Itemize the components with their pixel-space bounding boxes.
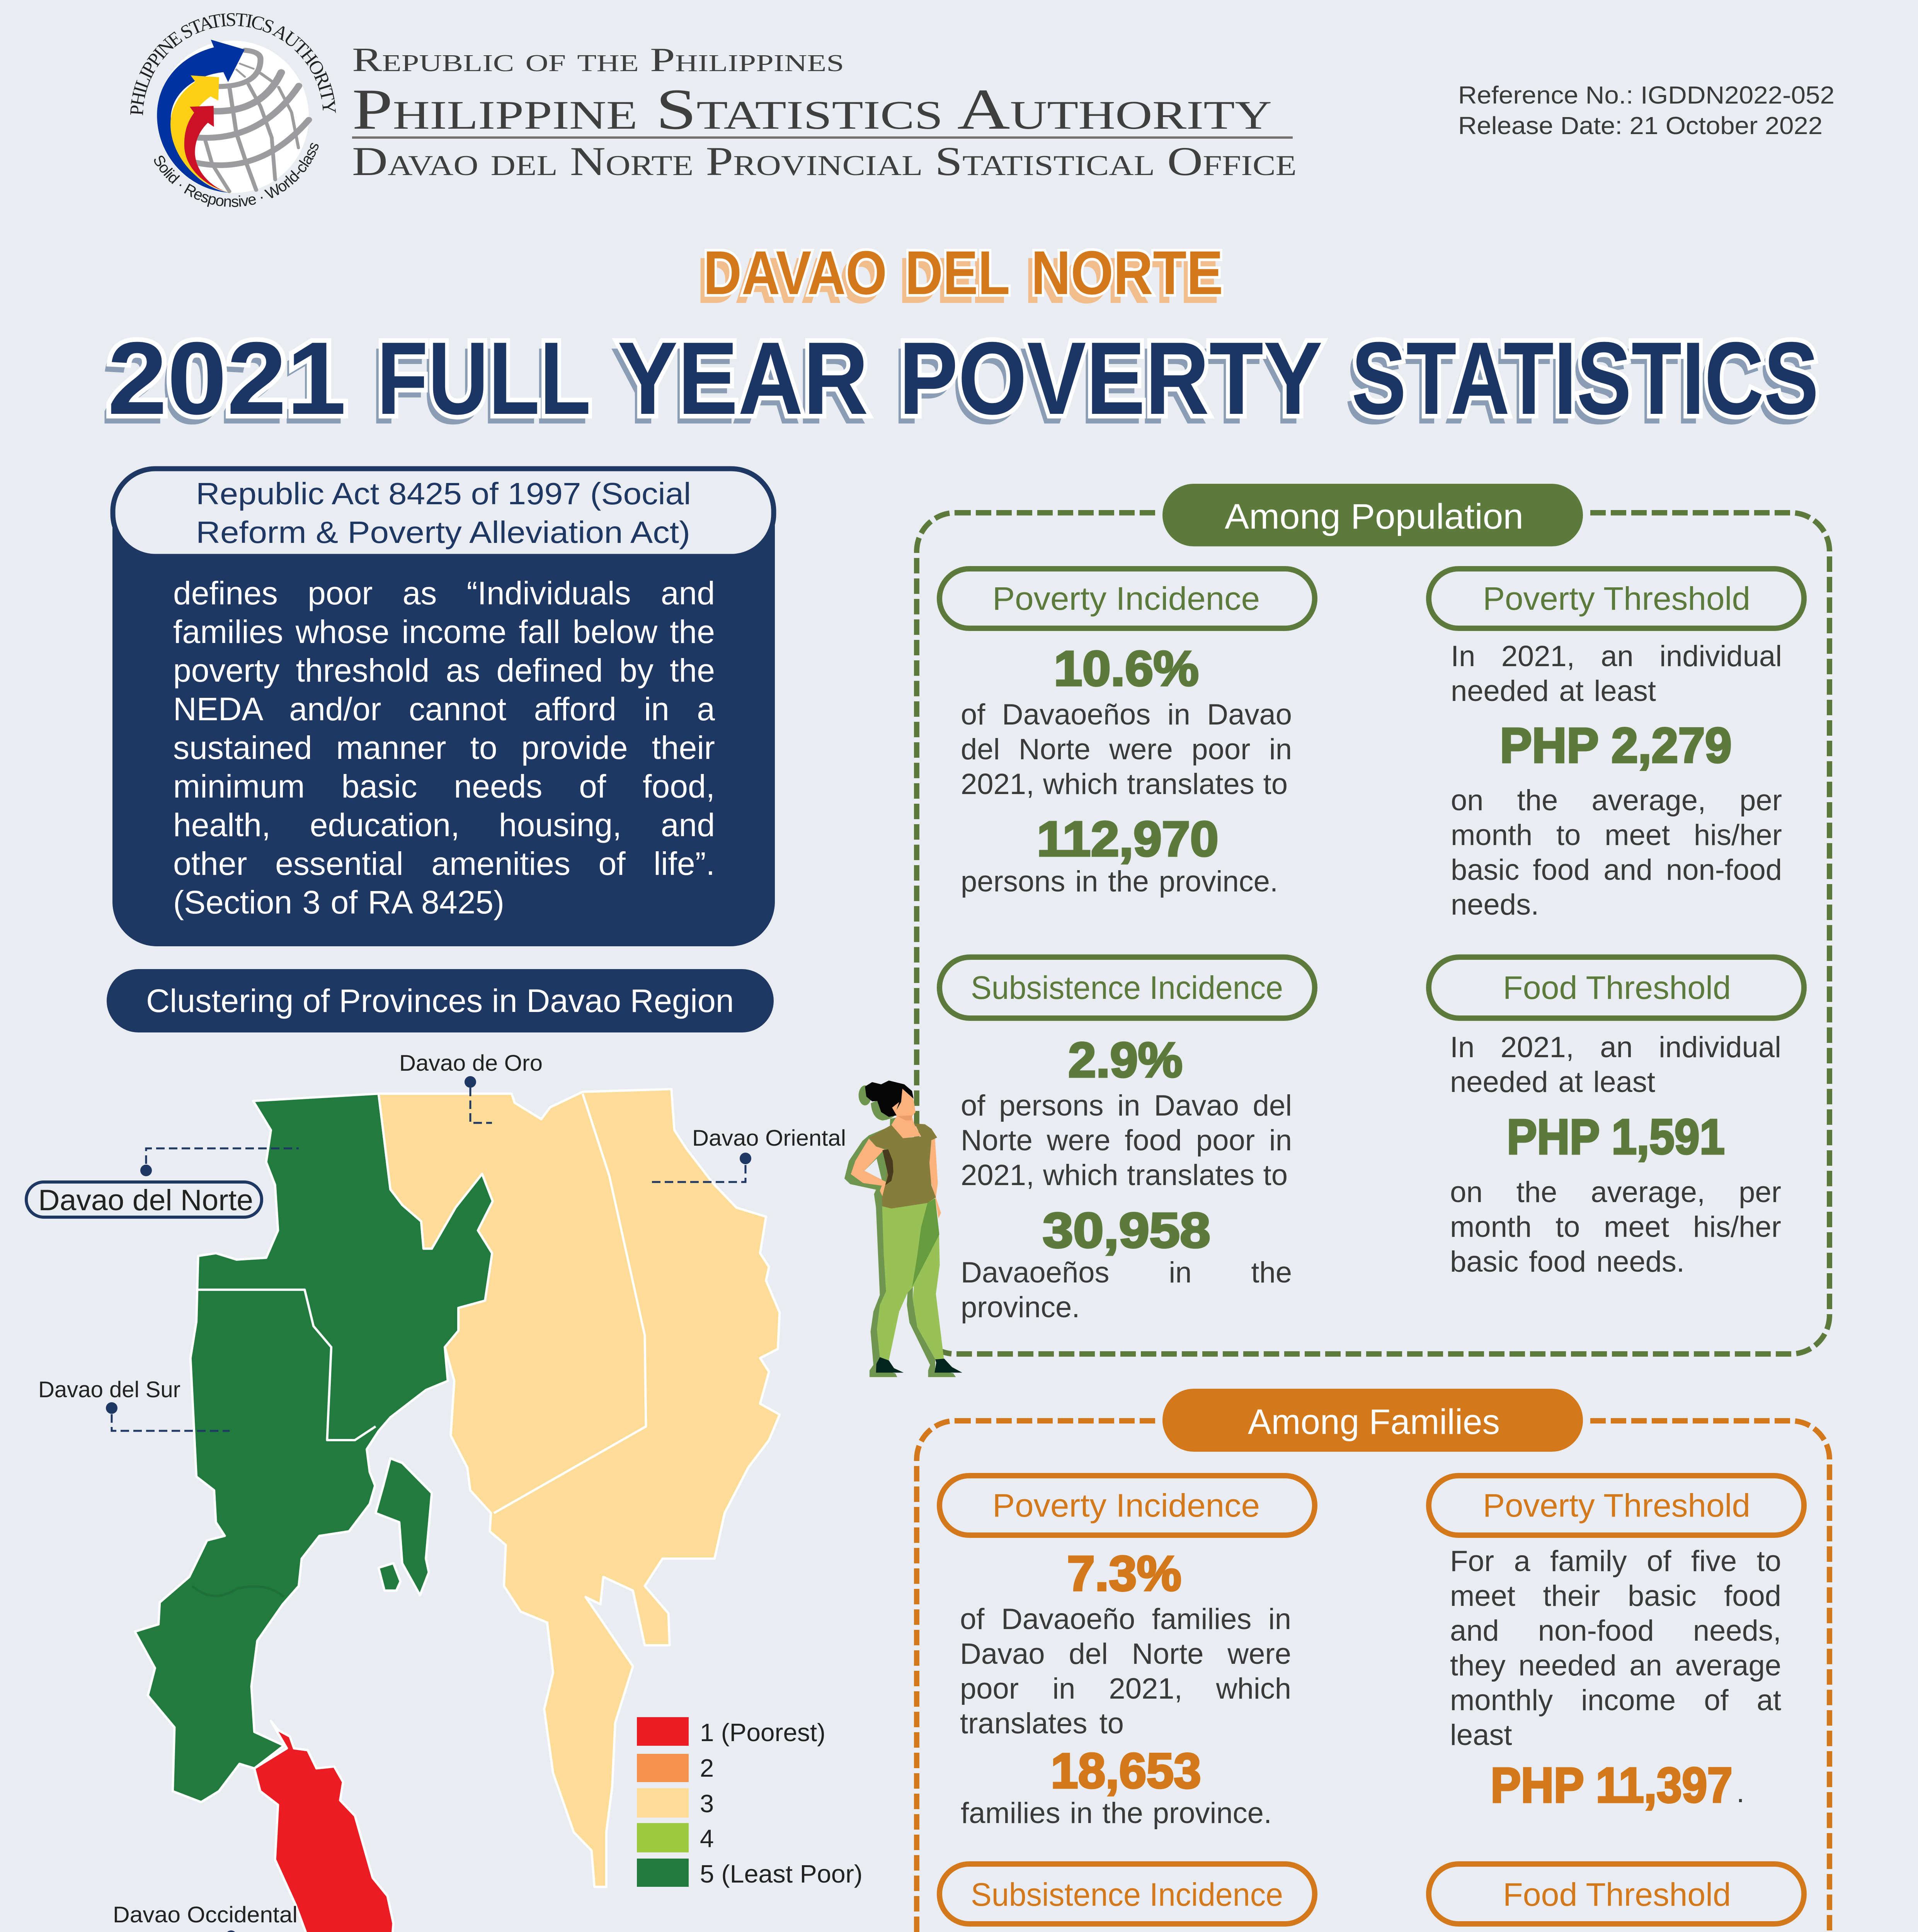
card: population poverty threshold: on the average, per — [1451, 784, 1782, 817]
main title: STATISTICS — [1347, 328, 1814, 444]
reference number and release date: Reference No.: IGDDN2022-052 — [1458, 81, 1835, 109]
card: family poverty incidence: 7.3% — [1067, 1546, 1181, 1601]
card: population food threshold — [1429, 957, 1804, 1283]
card: family food threshold — [1429, 1864, 1804, 1932]
card: family subsistence incidence: Subsistence Incidence — [971, 1876, 1283, 1913]
card: family poverty threshold: . — [1736, 1776, 1744, 1809]
provincial office line: Davao del Norte Provincial Statistical Office — [352, 139, 1297, 184]
map legend: 3 — [700, 1789, 714, 1818]
definition text: NEDA and/or cannot afford in a — [173, 691, 715, 727]
card: population poverty threshold: needed at least — [1451, 675, 1656, 707]
label: davao del norte: Davao del Norte — [38, 1184, 253, 1217]
card: population subsistence incidence: Subsistence Incidence — [971, 969, 1283, 1006]
card: population poverty incidence: persons in the province. — [961, 865, 1278, 898]
agency line: Philippine Statistics Authority — [352, 77, 1272, 141]
panel: republic act definition — [112, 469, 775, 946]
card: population food threshold: needed at least — [1450, 1066, 1655, 1099]
card: population poverty threshold: Poverty Threshold — [1483, 580, 1750, 617]
definition text: families whose income fall below the — [173, 614, 715, 650]
card: population poverty incidence: 2021, which translates to — [961, 768, 1288, 801]
main title: FULL — [377, 320, 589, 436]
card: population food threshold: on the average, per — [1450, 1176, 1781, 1209]
map: cluster 3 provinces — [379, 1089, 779, 1887]
label: davao del sur: Davao del Sur — [38, 1377, 180, 1402]
heading: clustering of provinces: Clustering of Provinces in Davao Region — [146, 983, 734, 1019]
heading pill: among population: Among Population — [1225, 497, 1523, 536]
label: davao de oro: Davao de Oro — [399, 1051, 543, 1076]
definition text: health, education, housing, and — [173, 807, 715, 843]
logo ring title: PHILIPPINE STATISTICS AUTHORITY — [126, 9, 340, 116]
label: davao occidental — [113, 1902, 335, 1932]
card: population poverty incidence: 10.6% — [1054, 641, 1199, 696]
definition text: (Section 3 of RA 8425) — [173, 884, 504, 920]
card: family poverty threshold: least — [1450, 1719, 1512, 1752]
card: family poverty incidence: families in the province. — [961, 1797, 1272, 1830]
main title: YEAR — [613, 328, 864, 444]
definition text: defines poor as “Individuals and — [173, 575, 715, 611]
main title: 2021 — [103, 328, 342, 444]
act title pill — [113, 469, 774, 556]
card: population subsistence incidence: of persons in Davao del — [961, 1089, 1292, 1122]
card: population subsistence incidence: 2021, which translates to — [961, 1159, 1288, 1192]
label: davao oriental — [650, 1126, 846, 1182]
definition text: minimum basic needs of food, — [173, 768, 715, 804]
card: family poverty threshold — [1429, 1476, 1804, 1813]
card: population food threshold: month to meet his/her — [1450, 1211, 1781, 1243]
card: population food threshold: In 2021, an individual — [1450, 1031, 1781, 1064]
card: population subsistence incidence: province. — [961, 1291, 1080, 1324]
card: family poverty threshold: Poverty Threshold — [1483, 1487, 1750, 1524]
card: population subsistence incidence: 2.9% — [1068, 1032, 1183, 1088]
heading: clustering of provinces — [107, 969, 774, 1032]
card: population poverty incidence: Poverty Incidence — [992, 580, 1260, 617]
panel: among families — [917, 1389, 1830, 1932]
main title: 2021 — [107, 320, 346, 436]
label: davao oriental: Davao Oriental — [692, 1126, 846, 1151]
card: population poverty threshold: month to meet his/her — [1451, 819, 1782, 852]
main title: FULL — [372, 328, 585, 444]
map: cluster 1 province — [230, 1721, 397, 1932]
label: davao del norte — [26, 1148, 299, 1217]
card: population poverty incidence: 112,970 — [1037, 811, 1219, 867]
province title: DEL — [900, 246, 1004, 315]
heading pill: among population — [1162, 484, 1583, 546]
heading pill: among families: Among Families — [1248, 1402, 1500, 1442]
province title: DAVAO — [703, 238, 887, 307]
card: family poverty incidence: Davao del Norte were — [960, 1638, 1291, 1670]
republic line: Republic of the Philippines — [352, 41, 844, 79]
main title: POVERTY — [899, 320, 1322, 436]
definition text — [173, 574, 722, 929]
card: population poverty incidence — [939, 569, 1315, 903]
act title pill: Reform & Poverty Alleviation Act) — [196, 515, 690, 549]
card: family poverty threshold: meet their basic food — [1450, 1580, 1781, 1612]
card: population food threshold: basic food needs. — [1450, 1245, 1685, 1278]
card: family food threshold: Food Threshold — [1503, 1876, 1731, 1913]
main title: YEAR — [618, 320, 868, 436]
card: population poverty threshold — [1429, 569, 1804, 926]
definition text: sustained manner to provide their — [173, 730, 715, 766]
card: family poverty threshold: For a family of five to — [1450, 1545, 1781, 1578]
label: davao de oro — [399, 1051, 543, 1123]
card: population poverty threshold: needs. — [1451, 888, 1539, 921]
card: population subsistence incidence: 30,958 — [1043, 1203, 1210, 1258]
map legend: 1 (Poorest) — [700, 1718, 825, 1747]
map legend: 5 (Least Poor) — [700, 1860, 863, 1888]
map legend: 2 — [700, 1754, 714, 1782]
main title: POVERTY — [894, 328, 1317, 444]
definition text: poverty threshold as defined by the — [173, 652, 715, 689]
card: population food threshold: PHP 1,591 — [1507, 1109, 1725, 1165]
province title: NORTE — [1031, 238, 1223, 307]
header: agency logo — [126, 9, 340, 211]
card: family poverty incidence: poor in 2021, which — [960, 1672, 1291, 1705]
card: population subsistence incidence: Norte were food poor in — [961, 1124, 1292, 1157]
card: population food threshold: Food Threshold — [1503, 969, 1731, 1006]
province title — [698, 238, 1223, 315]
map legend: 4 — [700, 1824, 714, 1852]
card: population subsistence incidence — [939, 957, 1315, 1329]
label: davao occidental: Davao Occidental — [113, 1902, 298, 1927]
reference number and release date — [1458, 81, 1835, 139]
card: population poverty threshold: basic food and non-food — [1451, 854, 1782, 886]
act title pill: Republic Act 8425 of 1997 (Social — [196, 476, 691, 511]
card: family poverty threshold: they needed an average — [1450, 1649, 1781, 1682]
map legend — [637, 1717, 863, 1888]
card: family poverty threshold: and non-food needs, — [1450, 1614, 1781, 1647]
illustration: woman standing — [844, 1080, 962, 1377]
card: family poverty incidence: translates to — [960, 1707, 1124, 1740]
card: family poverty incidence: Poverty Incidence — [992, 1487, 1260, 1524]
province title: NORTE — [1026, 246, 1218, 315]
logo ring motto: Solid · Responsive · World-class — [150, 140, 323, 211]
label: davao del sur — [38, 1377, 230, 1431]
card: family poverty incidence: of Davaoeño families in — [960, 1603, 1291, 1636]
logo globe with arrows — [157, 40, 309, 193]
card: population subsistence incidence: Davaoeños in the — [961, 1256, 1292, 1289]
card: population poverty threshold: PHP 2,279 — [1500, 718, 1732, 773]
card: family poverty incidence: 18,653 — [1051, 1743, 1201, 1799]
card: population poverty threshold: In 2021, an individual — [1451, 640, 1782, 673]
definition text: other essential amenities of life”. — [173, 845, 715, 882]
card: family poverty threshold: monthly income of at — [1450, 1684, 1781, 1717]
card: family poverty threshold: PHP 11,397 — [1491, 1758, 1732, 1813]
map: cluster 5 provinces — [135, 1094, 493, 1802]
card: family poverty incidence — [939, 1476, 1315, 1835]
province title: DAVAO — [698, 246, 882, 315]
header: agency names — [352, 41, 1297, 184]
main title — [103, 320, 1819, 444]
province title: DEL — [905, 238, 1009, 307]
card: family subsistence incidence — [939, 1864, 1315, 1932]
reference number and release date: Release Date: 21 October 2022 — [1458, 112, 1823, 139]
card: population poverty incidence: of Davaoeños in Davao — [961, 698, 1292, 731]
map of davao region — [135, 1089, 779, 1932]
heading pill: among families — [1162, 1389, 1583, 1452]
panel: among population — [917, 484, 1830, 1354]
card: population poverty incidence: del Norte were poor in — [961, 733, 1292, 766]
